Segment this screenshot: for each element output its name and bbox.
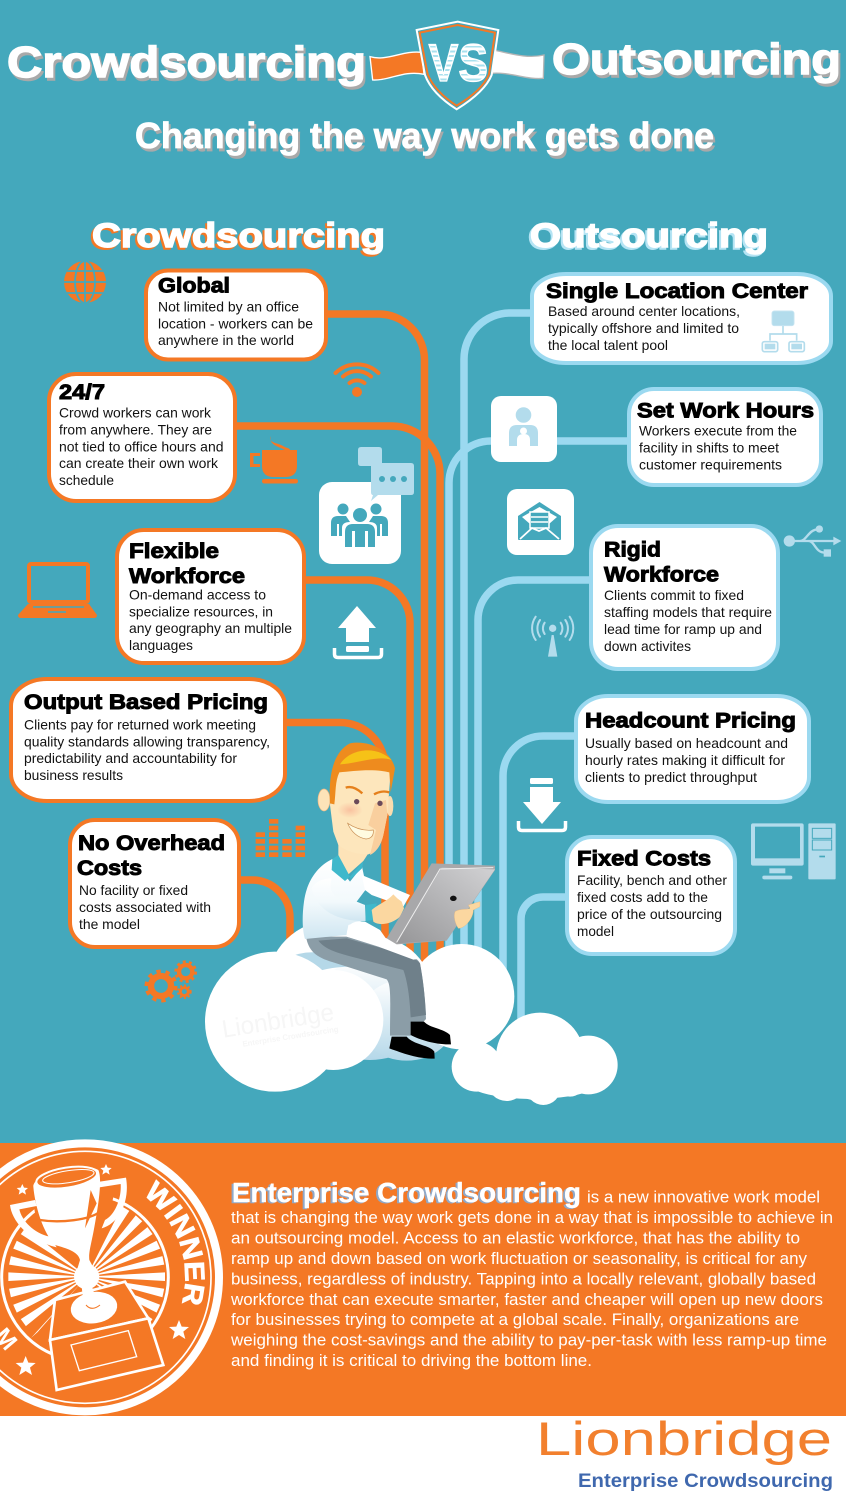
icon: gears bbox=[146, 962, 196, 1001]
icon: globe bbox=[64, 261, 106, 303]
text block: Enterprise Crowdsourcing description: an outsourcing model. Access to an elastic workforce, that has the ability to bbox=[231, 1228, 800, 1248]
panel: Global: Not limited by an office bbox=[158, 298, 299, 314]
panel: Single Location Center: the local talent pool bbox=[548, 337, 668, 353]
footer background bbox=[0, 1416, 846, 1495]
heading: Crowdsourcing column: Crowdsourcing bbox=[92, 217, 385, 255]
text block: Enterprise Crowdsourcing description: ramp up and down based on work fluctuation or seasonality, is critical for any bbox=[231, 1249, 807, 1268]
panel: 24/7: can create their own work bbox=[59, 455, 219, 471]
panel: Headcount Pricing: Usually based on headcount and bbox=[585, 735, 788, 751]
illustration: man with tablet bbox=[303, 743, 495, 1059]
panel: Flexible Workforce: specialize resources, in bbox=[129, 604, 273, 620]
panel: 24/7: from anywhere. They are bbox=[59, 422, 212, 438]
panel: Flexible Workforce: Flexible bbox=[129, 539, 219, 563]
panel: Single Location Center bbox=[532, 274, 831, 363]
panel: Rigid Workforce: down activites bbox=[604, 638, 691, 654]
panel: Flexible Workforce: languages bbox=[129, 637, 193, 653]
panel: Rigid Workforce bbox=[591, 526, 778, 669]
badge: stars bbox=[16, 1164, 189, 1375]
panel: Single Location Center: typically offshore and limited to bbox=[548, 320, 739, 336]
watermark on cloud: Enterprise Crowdsourcing bbox=[242, 1025, 339, 1049]
panel: 24/7 bbox=[49, 374, 235, 501]
panel: Rigid Workforce: lead time for ramp up and bbox=[604, 621, 762, 637]
panel: Global bbox=[146, 270, 326, 360]
orange band bbox=[0, 1143, 846, 1416]
panel: Rigid Workforce: staffing models that require bbox=[604, 604, 772, 620]
winner badge bbox=[0, 1139, 223, 1416]
man: trousers and shoes bbox=[306, 937, 451, 1059]
badge: rings bbox=[0, 1143, 219, 1411]
icon: download arrow bbox=[518, 778, 566, 830]
text block: Enterprise Crowdsourcing description: weighing the cost-savings and the ability to pay-per-task with less ramp-up time bbox=[230, 1331, 827, 1350]
panel: Output Based Pricing: predictability and accountability for bbox=[24, 750, 237, 766]
heading: Outsourcing column: Outsourcing bbox=[530, 217, 768, 255]
panel: No Overhead Costs: Costs bbox=[77, 856, 142, 880]
badge: WINNER lettering: WINNER bbox=[146, 1179, 205, 1305]
text block: Enterprise Crowdsourcing description: for businesses trying to compete at a global scale. Finally, organizations are bbox=[231, 1310, 799, 1329]
panel: 24/7: 24/7 bbox=[59, 380, 105, 404]
panel: Rigid Workforce: Workforce bbox=[604, 563, 719, 587]
panel: Headcount Pricing: Headcount Pricing bbox=[585, 709, 796, 733]
text block: Enterprise Crowdsourcing description: Enterprise Crowdsourcing bbox=[232, 1177, 581, 1208]
panel: No Overhead Costs: costs associated with bbox=[79, 899, 211, 915]
panel: Fixed Costs: fixed costs add to the bbox=[577, 889, 708, 905]
panel: Set Work Hours: customer requirements bbox=[639, 456, 782, 472]
panel: Flexible Workforce: On-demand access to bbox=[129, 586, 266, 602]
panel: Headcount Pricing: clients to predict throughput bbox=[585, 769, 757, 785]
panel: Output Based Pricing bbox=[11, 679, 285, 801]
badge: trophy bbox=[10, 1163, 163, 1390]
panel: Set Work Hours bbox=[629, 389, 821, 485]
panel: Fixed Costs: Fixed Costs bbox=[577, 847, 711, 871]
VS shield badge with banners bbox=[370, 22, 544, 109]
icon: network bbox=[762, 311, 804, 352]
subtitle: Changing the way work gets done bbox=[135, 115, 714, 156]
main title: Crowdsourcing: Crowdsourcing bbox=[7, 38, 366, 87]
connector lines: crowdsourcing bbox=[234, 314, 440, 1000]
text block: Enterprise Crowdsourcing description: business, regardless of industry. Tapping into a locally relevant, globally based bbox=[231, 1269, 816, 1288]
panel: Set Work Hours: Workers execute from the bbox=[639, 422, 797, 438]
panel: No Overhead Costs: the model bbox=[79, 916, 140, 932]
background bbox=[0, 0, 846, 1143]
panel: No Overhead Costs bbox=[70, 820, 239, 947]
illustration: clouds bbox=[205, 920, 618, 1105]
icon: desktop computer bbox=[751, 823, 836, 879]
panel: Headcount Pricing: hourly rates making it difficult for bbox=[585, 752, 785, 768]
text block: Enterprise Crowdsourcing description: that is changing the way work gets done in a way that is impossible to achieve in bbox=[231, 1208, 833, 1227]
panel: Single Location Center: Single Location Center bbox=[546, 279, 809, 303]
VS shield badge with banners: VS bbox=[429, 34, 488, 93]
man: upper body and head bbox=[303, 743, 495, 960]
icon tile: person bbox=[491, 396, 557, 462]
icon: antenna bbox=[532, 617, 573, 657]
panel: Rigid Workforce: Rigid bbox=[604, 538, 661, 562]
panel: Fixed Costs: Facility, bench and other bbox=[577, 872, 727, 888]
icon: laptop bbox=[18, 564, 97, 618]
panel: Output Based Pricing: Output Based Pricing bbox=[24, 690, 268, 714]
badge: rays bbox=[8, 1206, 165, 1338]
panel: 24/7: schedule bbox=[59, 472, 114, 488]
icon: equalizer bars bbox=[256, 819, 305, 857]
icon: coffee cup bbox=[250, 436, 298, 484]
panel: Output Based Pricing: business results bbox=[24, 767, 123, 783]
text block: Enterprise Crowdsourcing description: and finding it is critical to driving the bottom line. bbox=[231, 1351, 592, 1370]
icon: USB symbol bbox=[784, 525, 841, 557]
icon: wifi bbox=[336, 364, 378, 395]
panel: Global: Global bbox=[158, 274, 230, 298]
text block: Enterprise Crowdsourcing description: workforce that can execute smarter, faster and cheaper will open up new doors bbox=[230, 1290, 823, 1309]
panel: Output Based Pricing: Clients pay for returned work meeting bbox=[24, 716, 256, 732]
panel: Set Work Hours: facility in shifts to meet bbox=[639, 440, 779, 456]
panel: Headcount Pricing bbox=[576, 696, 809, 802]
icon: team tile with speech bubbles bbox=[319, 447, 414, 564]
panel: Fixed Costs: model bbox=[577, 923, 614, 939]
panel: 24/7: Crowd workers can work bbox=[59, 405, 212, 421]
text block: Enterprise Crowdsourcing description: is a new innovative work model bbox=[587, 1188, 820, 1206]
panel: Flexible Workforce: any geography an multiple bbox=[129, 620, 292, 636]
logo: Lionbridge: Lionbridge bbox=[536, 1412, 832, 1465]
connector lines: outsourcing bbox=[449, 313, 630, 1030]
panel: 24/7: not tied to office hours and bbox=[59, 438, 224, 454]
panel: Set Work Hours: Set Work Hours bbox=[637, 398, 814, 422]
panel: Global: location - workers can be bbox=[158, 316, 313, 332]
panel: No Overhead Costs: No Overhead bbox=[78, 831, 225, 855]
main title: Outsourcing: Outsourcing bbox=[552, 35, 841, 84]
icon: upload arrow bbox=[334, 606, 382, 658]
panel: Fixed Costs: price of the outsourcing bbox=[577, 906, 722, 922]
panel: Flexible Workforce bbox=[117, 530, 304, 663]
panel: No Overhead Costs: No facility or fixed bbox=[79, 882, 188, 898]
panel: Single Location Center: Based around center locations, bbox=[548, 303, 740, 319]
panel: Global: anywhere in the world bbox=[158, 332, 294, 348]
panel: Flexible Workforce: Workforce bbox=[129, 564, 245, 588]
panel: Output Based Pricing: quality standards allowing transparency, bbox=[24, 734, 270, 750]
panel: Fixed Costs bbox=[567, 837, 735, 954]
text block: Enterprise Crowdsourcing description bbox=[230, 1177, 833, 1370]
icon tile: open envelope bbox=[507, 489, 574, 555]
panel: Rigid Workforce: Clients commit to fixed bbox=[604, 587, 744, 603]
watermark on cloud: Lionbridge bbox=[220, 998, 336, 1044]
logo tagline: Enterprise Crowdsourcing bbox=[578, 1471, 833, 1492]
